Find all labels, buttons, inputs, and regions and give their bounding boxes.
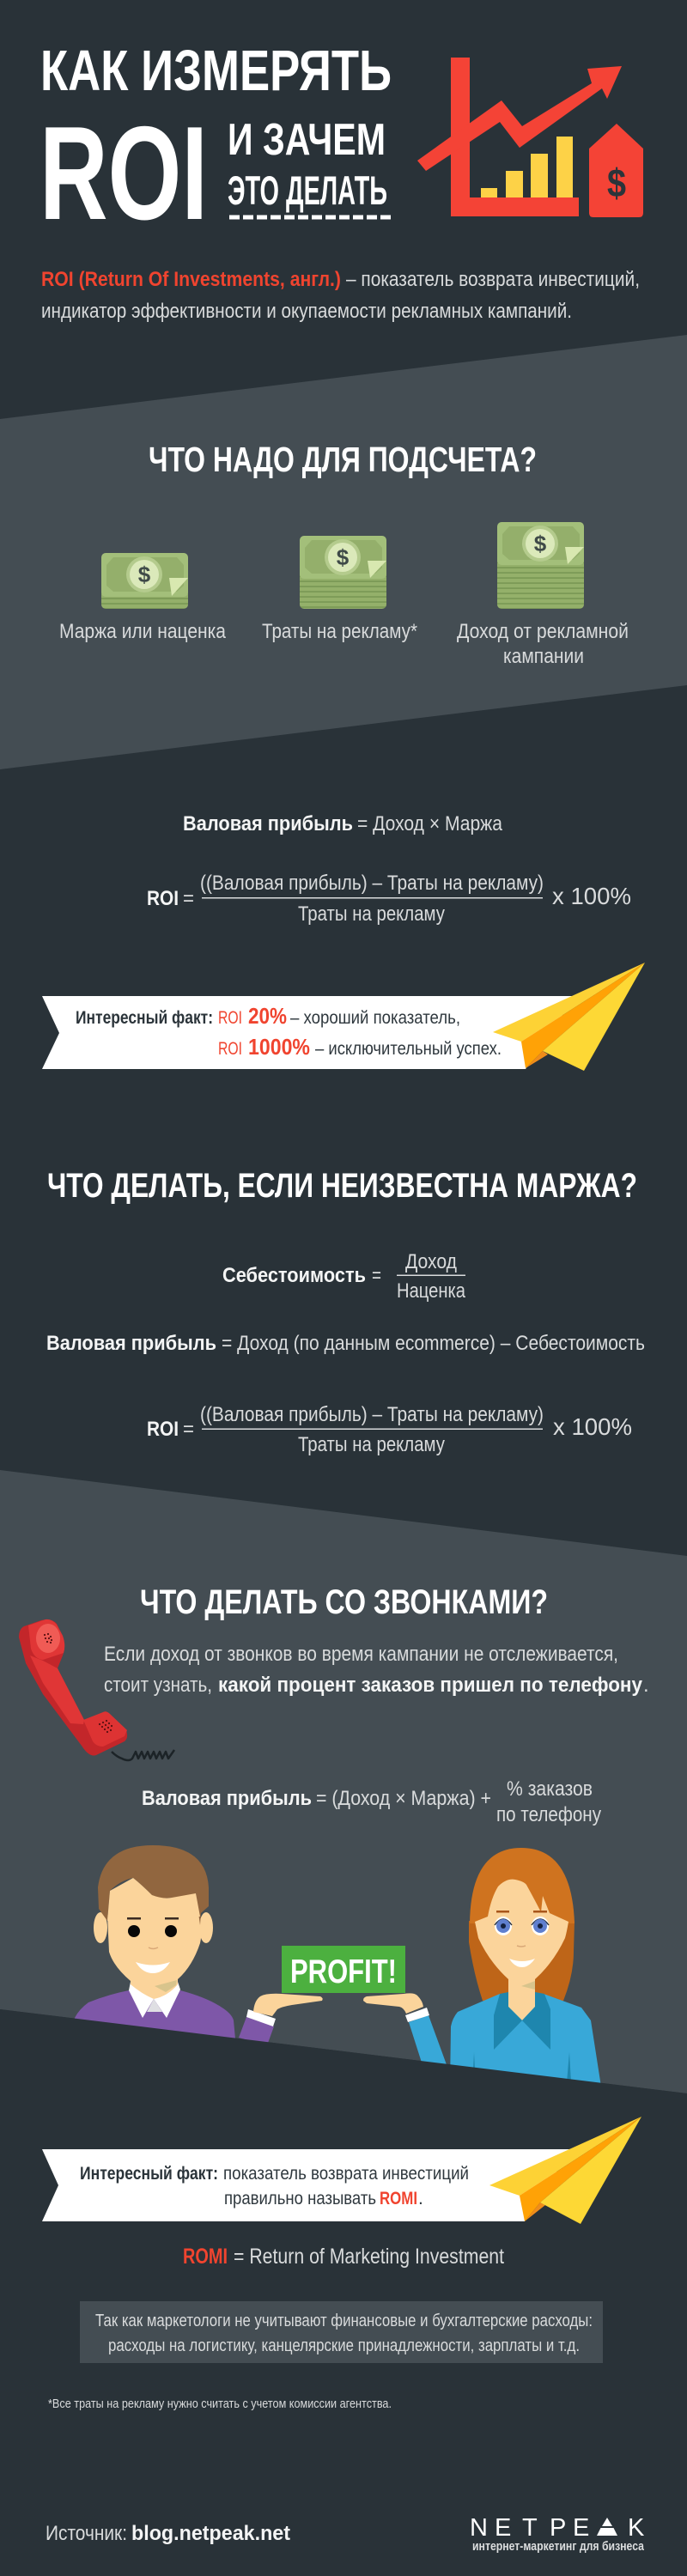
intro text	[41, 268, 640, 323]
title: ЭТО ДЕЛАТЬ	[228, 167, 387, 213]
formula: gross profit with phone orders: % заказов	[507, 1777, 593, 1801]
callout: interesting fact ROI: – исключительный успех.	[315, 1039, 502, 1059]
formula: cost: Доход	[405, 1250, 457, 1273]
intro text: индикатор эффективности и окупаемости рекламных кампаний.	[41, 300, 572, 323]
callout: interesting fact ROI: ROI	[218, 1039, 242, 1059]
formula: gross profit via ecommerce	[46, 1332, 645, 1355]
formula: ROI: Траты на рекламу	[298, 902, 445, 926]
lower dark panel	[0, 2009, 687, 2576]
text block: phone calls: какой процент заказов пришел по телефону	[218, 1674, 643, 1697]
callout: interesting fact ROI: 20%	[248, 1003, 287, 1029]
icon: paper plane	[489, 2117, 641, 2224]
note panel: Так как маркетологи не учитывают финансовые и бухгалтерские расходы:	[95, 2312, 593, 2330]
formula: ROI repeated: =	[183, 1418, 194, 1441]
formula: gross profit: = Доход × Маржа	[357, 812, 503, 835]
intro text: ROI (Return Of Investments, англ.)	[41, 268, 341, 291]
formula: ROI repeated: x 100%	[553, 1413, 632, 1440]
ROMI definition: ROMI	[183, 2245, 228, 2269]
label: ad spend: Траты на рекламу*	[262, 620, 417, 643]
note panel	[80, 2301, 603, 2363]
icon: money stack small	[101, 553, 188, 609]
text block: phone calls: стоит узнать,	[104, 1674, 212, 1697]
callout: interesting fact ROMI: .	[418, 2189, 423, 2208]
icon: red telephone handset	[19, 1619, 174, 1760]
icon: paper plane	[493, 963, 645, 1071]
formula: gross profit with phone orders: Валовая прибыль	[142, 1787, 312, 1810]
icon: money stack medium: $	[337, 544, 350, 570]
icon: money stack medium	[300, 536, 386, 609]
formula: ROI	[147, 872, 631, 926]
callout: interesting fact ROI: – хороший показатель,	[290, 1008, 460, 1028]
formula: ROI repeated: Траты на рекламу	[298, 1433, 445, 1456]
logo: Netpeak: NETPE	[470, 2514, 589, 2542]
formula: cost: Себестоимость	[222, 1264, 366, 1287]
icon: money stack large: $	[534, 531, 547, 556]
heading: phone calls: ЧТО ДЕЛАТЬ СО ЗВОНКАМИ?	[140, 1583, 548, 1621]
text block: phone calls: Если доход от звонков во время кампании не отслеживается,	[104, 1643, 618, 1666]
illustration: profit sign: PROFIT!	[290, 1953, 397, 1990]
formula: ROI: ((Валовая прибыль) – Траты на рекламу)	[200, 872, 544, 895]
label: campaign revenue: кампании	[503, 645, 584, 668]
icon: growth chart with price tag: $	[607, 161, 626, 205]
callout: interesting fact ROI: Интересный факт:	[76, 1008, 213, 1028]
formula: cost	[222, 1250, 466, 1303]
label: campaign revenue	[457, 620, 629, 668]
source: Источник:	[46, 2522, 127, 2545]
note panel: расходы на логистику, канцелярские принадлежности, зарплаты и т.д.	[108, 2336, 580, 2355]
formula: ROI repeated	[147, 1403, 632, 1456]
illustration: woman	[363, 1848, 601, 2087]
label: campaign revenue: Доход от рекламной	[457, 620, 629, 643]
icon: money stack small: $	[138, 562, 151, 587]
title: И ЗАЧЕМ	[228, 115, 386, 165]
source	[46, 2522, 290, 2545]
formula: gross profit with phone orders	[142, 1777, 601, 1826]
callout: interesting fact ROI: 1000%	[248, 1034, 310, 1060]
heading: what is needed: ЧТО НАДО ДЛЯ ПОДСЧЕТА?	[149, 440, 537, 479]
callout: interesting fact ROMI: показатель возврата инвестиций	[223, 2164, 469, 2184]
formula: ROI: x 100%	[552, 883, 631, 909]
callout: interesting fact ROMI	[42, 2117, 641, 2224]
ROMI definition: = Return of Marketing Investment	[234, 2245, 504, 2269]
formula: gross profit: Валовая прибыль	[183, 812, 353, 835]
source: blog.netpeak.net	[131, 2522, 290, 2545]
callout: interesting fact ROI: ROI	[218, 1008, 242, 1028]
formula: cost: =	[372, 1264, 381, 1287]
formula: gross profit with phone orders: по телефону	[496, 1803, 601, 1826]
logo: Netpeak: интернет-маркетинг для бизнеса	[472, 2539, 645, 2554]
formula: gross profit with phone orders: = (Доход × Маржа) +	[316, 1787, 491, 1810]
intro text: – показатель возврата инвестиций,	[346, 268, 640, 291]
formula: ROI: ROI	[147, 887, 179, 910]
callout: interesting fact ROMI: ROMI	[380, 2189, 417, 2208]
text block: phone calls: .	[643, 1674, 649, 1697]
title: КАК ИЗМЕРЯТЬ	[40, 39, 392, 103]
illustration: man	[75, 1845, 323, 2048]
icon: growth chart with price tag	[417, 58, 643, 217]
formula: ROI repeated: ROI	[147, 1418, 179, 1441]
callout: interesting fact ROMI: правильно называть	[224, 2189, 376, 2208]
logo: Netpeak: K	[628, 2514, 645, 2542]
title: ROI	[40, 99, 208, 247]
label: margin: Маржа или наценка	[59, 620, 227, 643]
icon: money stack large	[497, 522, 584, 609]
callout: interesting fact ROMI: Интересный факт:	[80, 2164, 218, 2184]
formula: gross profit	[183, 812, 503, 835]
formula: cost: Наценка	[397, 1279, 466, 1303]
formula: ROI: =	[183, 887, 194, 910]
formula: ROI repeated: ((Валовая прибыль) – Траты на рекламу)	[200, 1403, 544, 1426]
text block: phone calls	[104, 1643, 649, 1697]
title	[40, 39, 392, 247]
formula: gross profit via ecommerce: Валовая прибыль	[46, 1332, 216, 1355]
logo: Netpeak	[470, 2514, 645, 2554]
callout: interesting fact ROI	[42, 963, 645, 1071]
illustration: profit sign	[282, 1946, 405, 1993]
footnote: *Все траты на рекламу нужно считать с учетом комиссии агентства.	[48, 2397, 392, 2411]
